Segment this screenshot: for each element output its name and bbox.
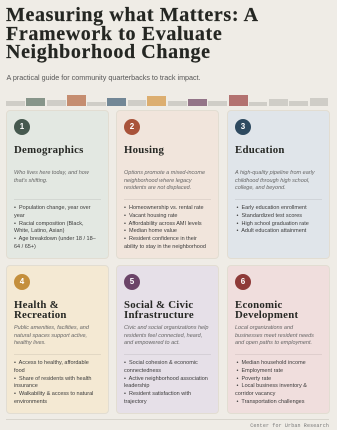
metrics list: • Homeownership vs. rental rate (124, 205, 204, 211)
number badge 5: 5 (130, 277, 134, 286)
metrics list: • Local business inventory & (237, 383, 307, 389)
number badge 1 (14, 119, 30, 135)
metrics list: ability to stay in the neighborhood (124, 244, 206, 250)
description: natural spaces support active, (14, 333, 87, 339)
metrics list: White, Latino, Asian) (14, 228, 64, 234)
metrics list: trajectory (124, 399, 147, 405)
heading: Development (235, 308, 298, 320)
metrics list (14, 360, 93, 405)
metrics list: • Resident confidence in their (124, 236, 197, 242)
title: Framework to Evaluate (6, 23, 222, 45)
description: Options promote a mixed-income (124, 170, 205, 176)
metrics list: • Adult education attainment (237, 228, 306, 234)
metrics list (235, 360, 307, 405)
title: Neighborhood Change (6, 41, 211, 63)
metrics list: • Resident satisfaction with (124, 391, 191, 397)
heading: Social & Civic (124, 298, 193, 310)
heading: Demographics (14, 144, 84, 156)
heading (124, 298, 194, 320)
number badge 6 (235, 274, 251, 290)
heading (14, 298, 67, 320)
metrics list: • Access to healthy, affordable (14, 360, 89, 366)
description: Who lives here today, and how (14, 170, 89, 176)
heading: Infrastructure (124, 308, 194, 320)
description: college, and beyond. (235, 185, 286, 191)
number badge 3: 3 (241, 122, 245, 131)
metrics list: • High school graduation rate (237, 220, 309, 226)
number badge 2 (124, 119, 140, 135)
description: residents feel connected, heard, (124, 333, 202, 339)
metrics list: leadership (124, 383, 149, 389)
metrics list: • Early education enrollment (237, 205, 307, 211)
metrics list: year (14, 213, 25, 219)
panel: health and recreation (6, 265, 109, 414)
panel: economic development (227, 265, 330, 414)
description: A high-quality pipeline from early (235, 170, 315, 176)
heading: Housing (124, 144, 164, 156)
metrics list: • Employment rate (237, 368, 283, 374)
color bar strip (6, 95, 328, 106)
description: Civic and social organizations help (124, 325, 208, 331)
metrics list: • Affordability across AMI levels (124, 220, 202, 226)
description: and open paths to employment. (235, 340, 312, 346)
panel: housing (116, 110, 219, 259)
number badge 1: 1 (20, 122, 24, 131)
subtitle: A practical guide for community quarterbacks to track impact. (6, 73, 201, 82)
metrics list: • Social cohesion & economic (124, 360, 198, 366)
description: that's shifting. (14, 178, 47, 184)
description (234, 170, 315, 191)
panel: social and civic infrastructure (116, 265, 219, 414)
metrics list: • Poverty rate (237, 376, 271, 382)
heading: Economic (235, 298, 283, 310)
metrics list: • Age breakdown (under 18 / 18– (14, 236, 96, 242)
metrics list: corridor vacancy (235, 391, 275, 397)
metrics list: insurance (14, 383, 38, 389)
description: Local organizations and (235, 325, 293, 331)
panel: education (227, 110, 330, 259)
metrics list (124, 205, 206, 250)
description: businesses meet resident needs (235, 333, 314, 339)
description (14, 170, 90, 184)
heading: Recreation (14, 308, 67, 320)
metrics list: 64 / 65+) (14, 244, 36, 250)
description: Public amenities, facilities, and (14, 325, 89, 331)
description: and empowered to act. (124, 340, 180, 346)
description (14, 325, 90, 346)
metrics list: • Transportation challenges (237, 399, 304, 405)
heading (235, 298, 298, 320)
metrics list: • Median home value (124, 228, 177, 234)
description: neighborhood where legacy (124, 178, 192, 184)
number badge 2: 2 (130, 122, 134, 131)
metrics list: • Share of residents with health (14, 376, 91, 382)
number badge 4 (14, 274, 30, 290)
description: residents are not displaced. (124, 185, 191, 191)
description: healthy lives. (14, 340, 46, 346)
metrics list: • Vacant housing rate (124, 213, 178, 219)
metrics list: • Walkability & access to natural (14, 391, 93, 397)
description: childhood through high school, (235, 178, 310, 184)
number badge 5 (124, 274, 140, 290)
metrics list (236, 205, 309, 234)
metrics list: environments (14, 399, 47, 405)
metrics list: • Median household income (237, 360, 306, 366)
description (124, 170, 205, 191)
panel: demographics (6, 110, 109, 259)
metrics list (14, 205, 96, 250)
description (124, 325, 208, 346)
heading: Health & (14, 298, 59, 310)
number badge 4: 4 (20, 277, 24, 286)
metrics list: • Standardized test scores (237, 213, 302, 219)
metrics list: • Active neighborhood association (124, 376, 208, 382)
footer credit: Center for Urban Research (250, 423, 329, 429)
title: Measuring what Matters: A (6, 4, 259, 26)
metrics list: • Racial composition (Black, (14, 220, 83, 226)
description (235, 325, 314, 346)
metrics list: food (14, 368, 25, 374)
metrics list (124, 360, 208, 405)
number badge 6: 6 (241, 277, 245, 286)
title (6, 4, 259, 63)
heading: Education (235, 144, 285, 156)
number badge 3 (235, 119, 251, 135)
metrics list: • Population change, year over (14, 205, 91, 211)
metrics list: connectedness (124, 368, 161, 374)
